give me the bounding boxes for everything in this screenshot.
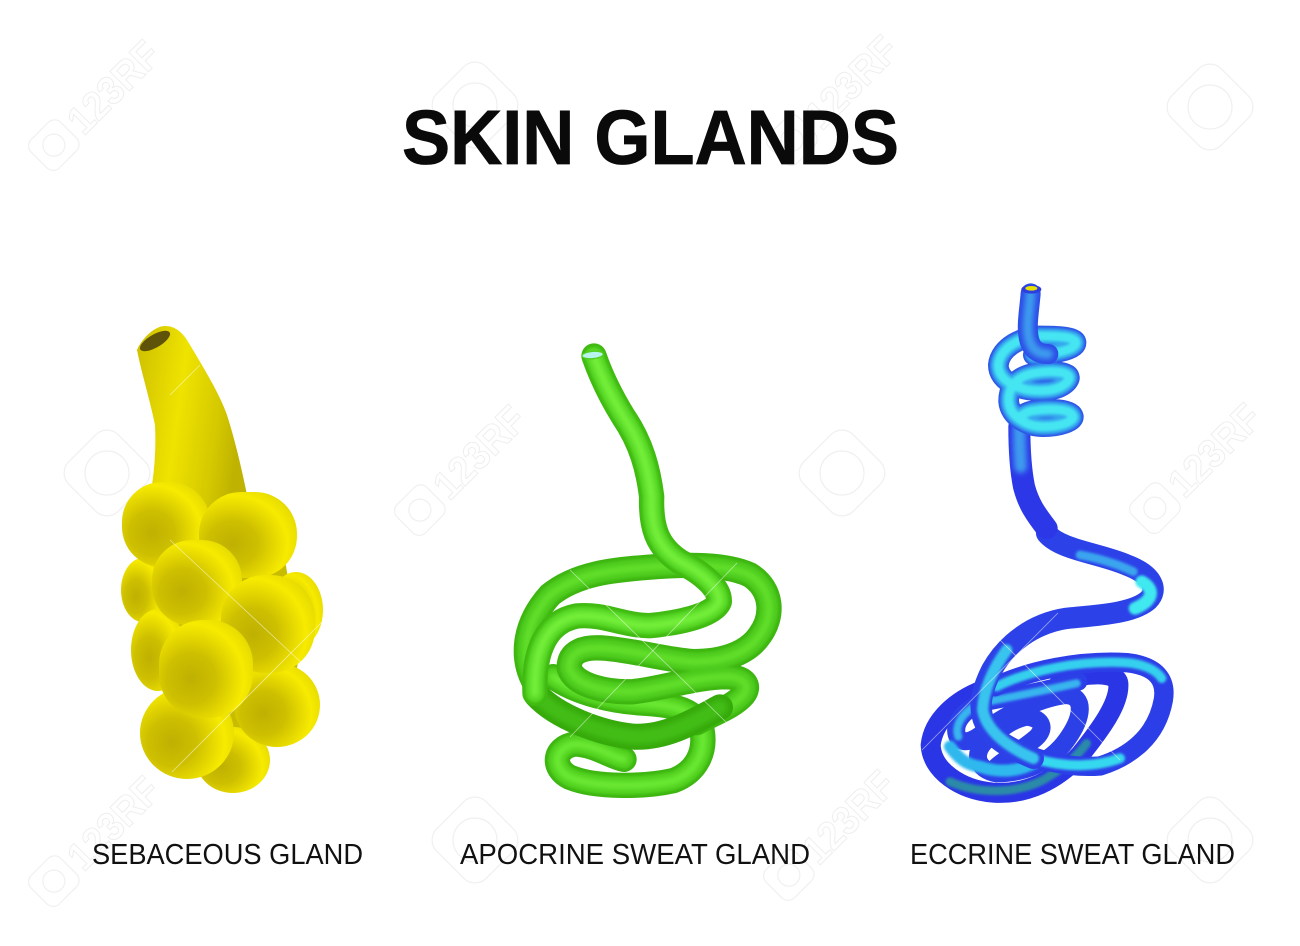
blue duct opening xyxy=(1021,285,1041,294)
top duct xyxy=(1028,293,1048,354)
duct opening xyxy=(137,327,173,355)
label: apocrine sweat gland: APOCRINE SWEAT GLAND xyxy=(460,839,810,871)
green outer back loop xyxy=(526,565,769,723)
watermarks: 123RF xyxy=(1160,396,1270,506)
green duct opening xyxy=(582,350,604,360)
yellow duct xyxy=(137,326,247,540)
label: sebaceous gland: SEBACEOUS GLAND xyxy=(92,839,363,871)
watermarks: 123RF xyxy=(59,769,169,879)
outer ring xyxy=(931,674,1118,793)
watermarks: 123RF xyxy=(425,398,535,508)
watermarks: 123RF xyxy=(797,28,907,138)
watermarks: 123RF xyxy=(59,33,169,143)
apocrine sweat gland illustration xyxy=(526,350,769,785)
lobe backing xyxy=(150,500,300,760)
green duct and upper fold xyxy=(535,356,719,693)
blue lower coil xyxy=(931,533,1164,793)
label: eccrine sweat gland: ECCRINE SWEAT GLAND xyxy=(910,839,1235,871)
spiral coil xyxy=(998,336,1076,427)
sebaceous gland illustration xyxy=(121,326,323,793)
eccrine sweat gland illustration xyxy=(931,285,1164,793)
inner coils xyxy=(950,682,1080,773)
green front band xyxy=(537,695,720,737)
green bottom loop xyxy=(553,677,703,785)
blue upper coil xyxy=(998,285,1076,528)
lower duct section xyxy=(1019,427,1047,528)
watermarks: 123RF xyxy=(794,763,904,873)
watermark lines over glands xyxy=(170,365,1120,772)
title: SKIN GLANDS xyxy=(402,95,899,181)
outer upper band xyxy=(990,662,1164,766)
yellow lobes xyxy=(121,482,323,793)
descending duct xyxy=(981,533,1153,758)
